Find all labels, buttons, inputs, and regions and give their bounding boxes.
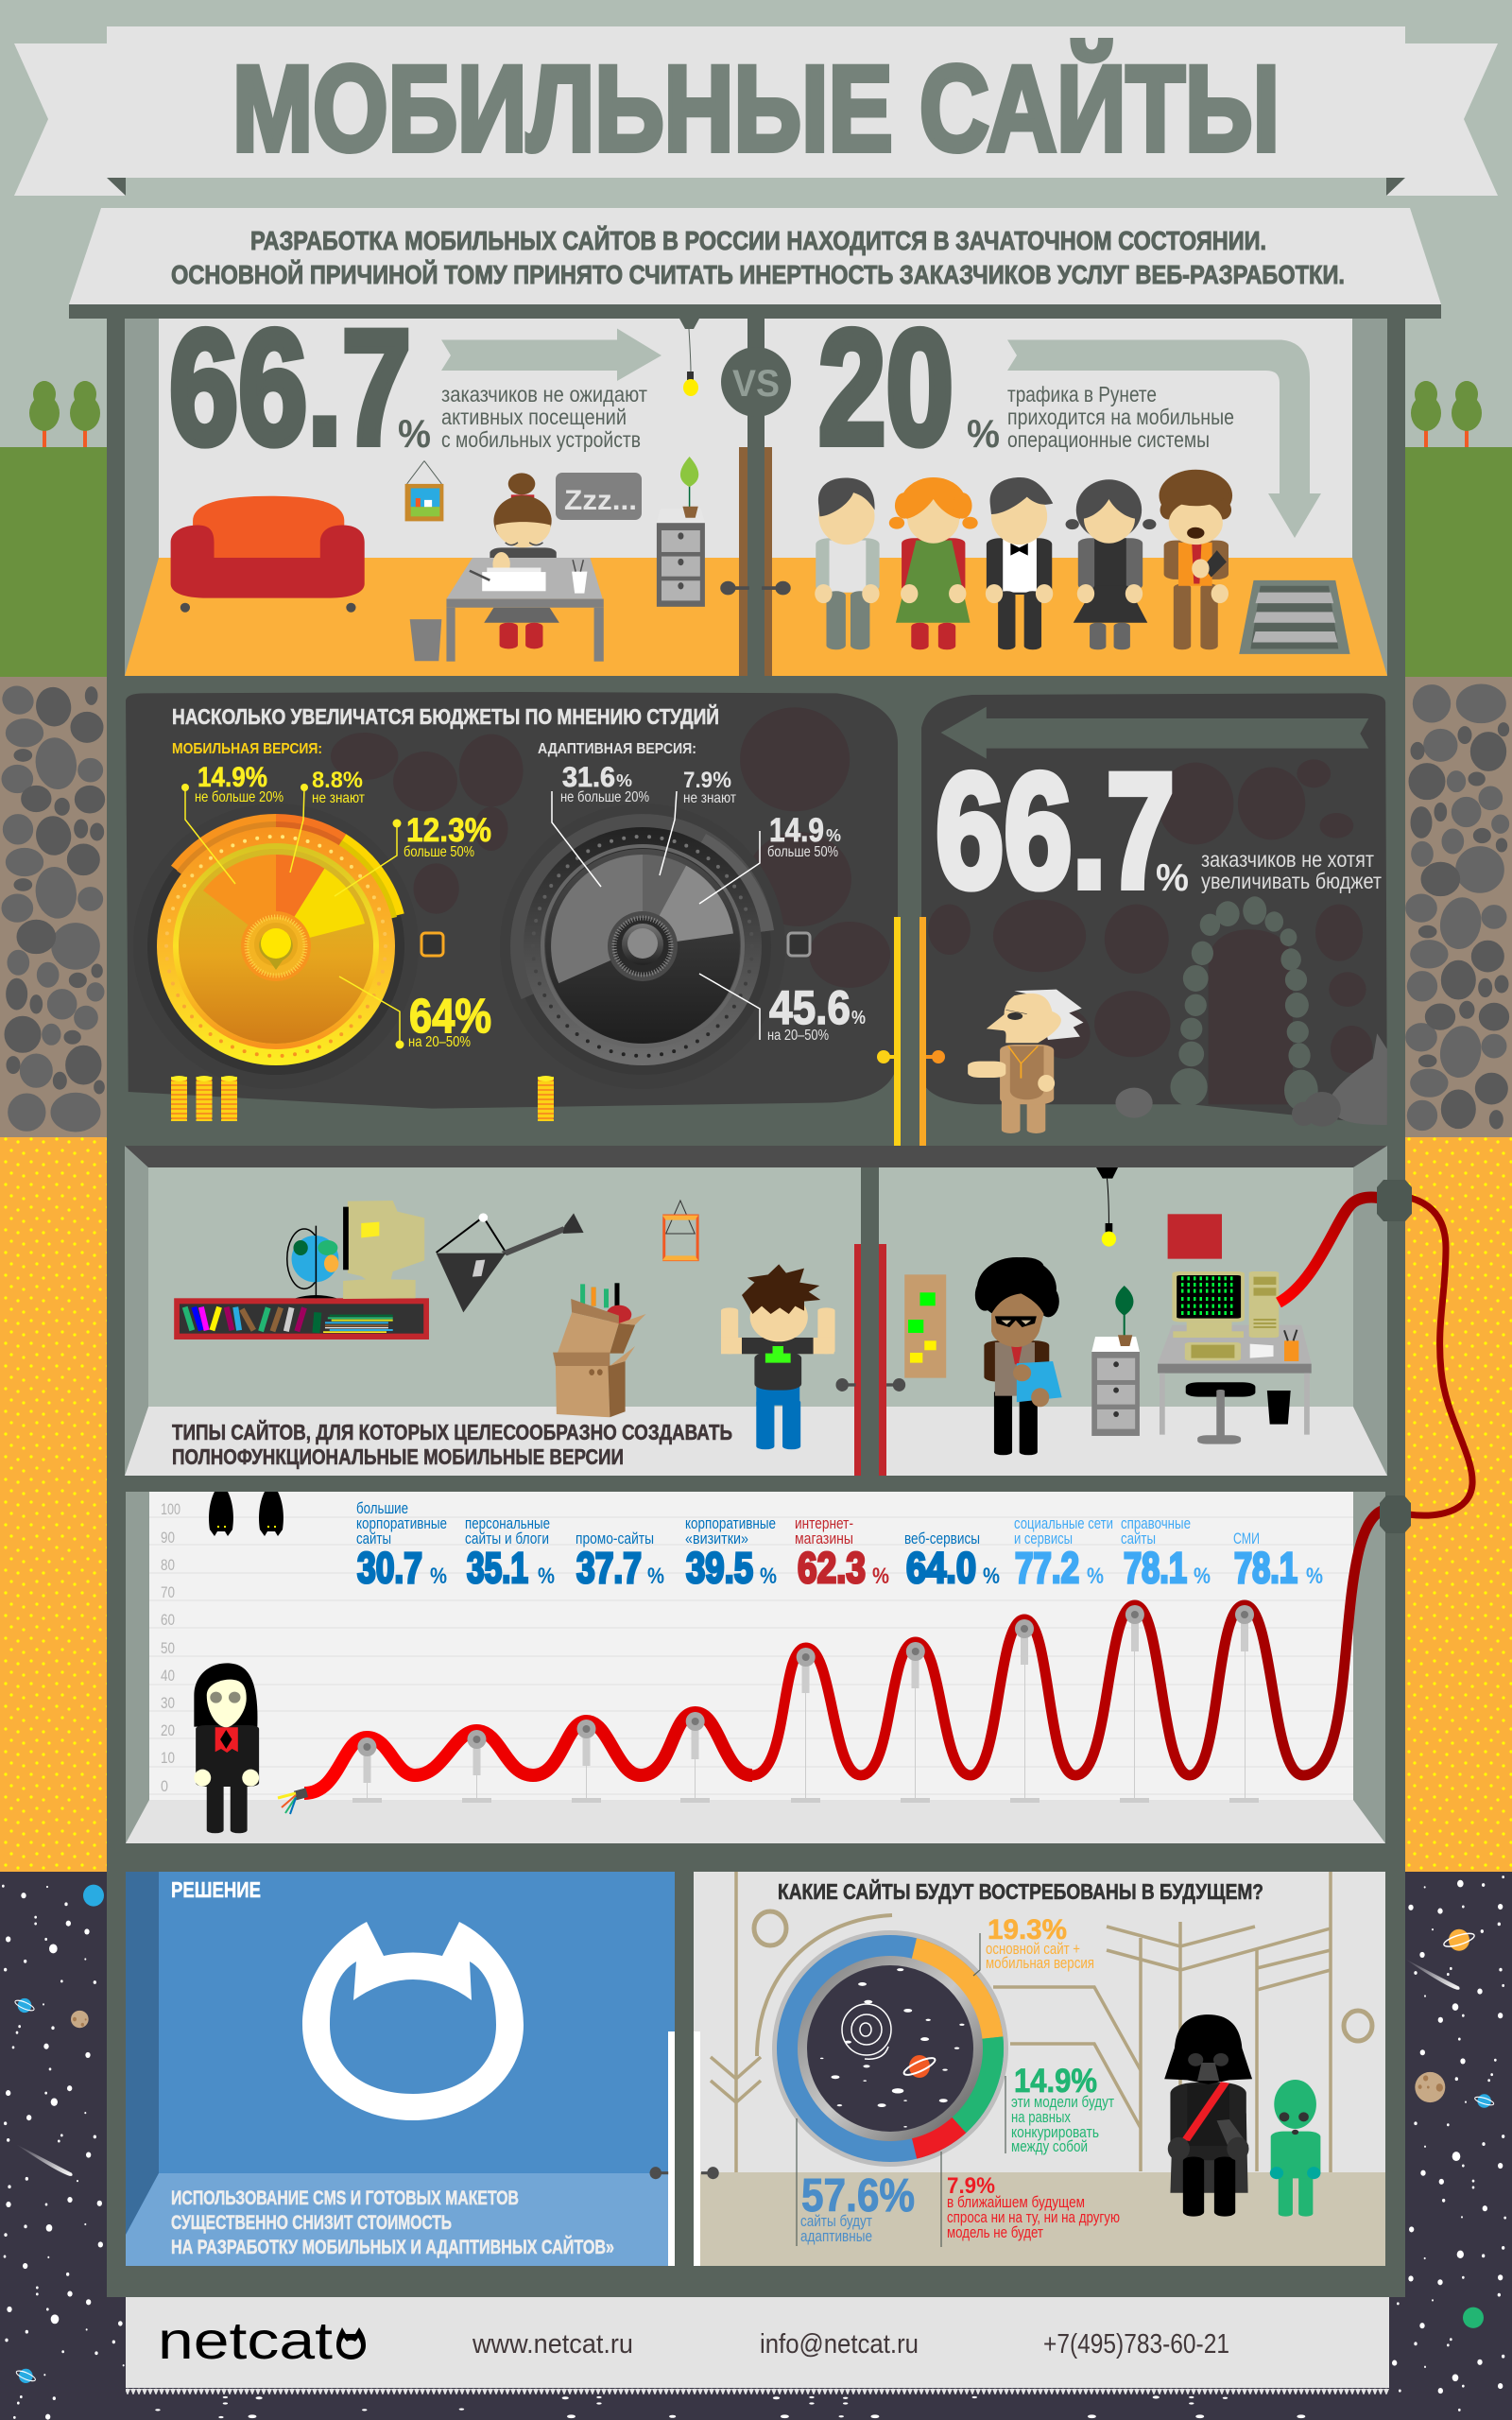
category: large corporate [356, 1499, 447, 1592]
value 12.3: 12.3% [406, 812, 491, 849]
category: online stores: магазины [795, 1530, 853, 1547]
y axis labels: 20 [161, 1721, 175, 1739]
title: МОБИЛЬНЫЕ САЙТЫ [232, 41, 1280, 177]
person 4 [1066, 479, 1156, 649]
icon: bats [209, 1492, 284, 1536]
stars and planets right [1392, 1876, 1506, 2411]
rocks right [1406, 684, 1508, 1130]
category: reference sites: сайты [1121, 1530, 1156, 1547]
subtitle [171, 225, 1345, 289]
category: personal: % [538, 1564, 555, 1589]
illustration: workshop objects and characters [174, 1167, 1312, 1455]
power cable from computer [1279, 1198, 1378, 1303]
value 7.9: модель не будет [947, 2223, 1043, 2241]
trees right [1411, 381, 1482, 447]
footer panel [126, 2297, 1389, 2394]
y axis labels: 100 [161, 1500, 180, 1518]
icon: dial handle gray [788, 933, 810, 956]
solution text [171, 2187, 614, 2258]
trees left [29, 381, 100, 447]
email: info@netcat.ru [760, 2329, 919, 2360]
value 45.6: на 20–50% [767, 1028, 829, 1044]
value 7.9: 7.9% [947, 2173, 995, 2199]
vs badge: VS [732, 363, 780, 405]
category: web services: веб-сервисы [904, 1530, 980, 1547]
flying v guitar [437, 1213, 584, 1312]
callout lines: donut [797, 1933, 1005, 2247]
desk with computer [1158, 1271, 1312, 1435]
solution heading: РЕШЕНИЕ [171, 1877, 261, 1902]
value 14.9: % [826, 826, 841, 845]
person 3 [986, 477, 1053, 649]
category: social networks: и сервисы [1014, 1530, 1073, 1547]
value 64: на 20–50% [408, 1034, 471, 1050]
value 45.6: % [851, 1008, 866, 1028]
stat: 20 percent: приходится на мобильные [1007, 405, 1234, 429]
category: web services: % [983, 1564, 1000, 1589]
value 14.9: на равных [1011, 2108, 1071, 2126]
cave arch stones [1170, 896, 1318, 1111]
soil layer [0, 677, 1512, 1137]
category: large corporate: % [430, 1564, 447, 1589]
door knobs [720, 581, 791, 595]
icon: netcat cat logo [302, 1922, 524, 2120]
vs badge [721, 347, 791, 417]
panel: cave with 66.7 [921, 693, 1387, 1133]
solution text: ИСПОЛЬЗОВАНИЕ CMS И ГОТОВЫХ МАКЕТОВ [171, 2187, 519, 2209]
category: web services: 64.0 [906, 1544, 976, 1592]
netcat logo: netcat [158, 2310, 334, 2370]
value 8.8: 8.8% [312, 768, 363, 793]
old computer monitor [343, 1201, 424, 1299]
category: business cards: корпоративные [685, 1514, 776, 1532]
sleeping woman at desk [446, 473, 604, 662]
chart: cable wave line [304, 1509, 1389, 1793]
illustration: door knobs, dark lord and alien [650, 2014, 1320, 2217]
chart: mobile version vault dial [133, 804, 419, 1089]
website: www.netcat.ru [472, 2329, 633, 2360]
category: online stores: интернет- [795, 1514, 853, 1532]
cable end wires [278, 1788, 308, 1814]
value 12.3 [404, 812, 491, 860]
category: personal: персональные [465, 1514, 550, 1532]
category: reference sites: % [1194, 1564, 1211, 1589]
cable clamp upper [1377, 1180, 1412, 1221]
curly-haired man with folder [975, 1257, 1062, 1455]
phone: +7(495)783-60-21 [1043, 2329, 1229, 2360]
icon: coin stacks [171, 1076, 237, 1121]
value 14.9 [767, 812, 841, 860]
person 2 [889, 477, 978, 649]
person 5 with phone [1160, 470, 1232, 649]
stat: 66.7 percent: % [398, 411, 431, 456]
zzz bubble [556, 473, 642, 520]
callouts: adaptive version [552, 762, 866, 1044]
space layer [0, 1872, 1512, 2420]
cable clamp lower [1380, 1495, 1411, 1533]
value 19.3: мобильная версия [986, 1954, 1094, 1972]
icon: coin stack [538, 1076, 554, 1121]
y axis labels: 50 [161, 1639, 175, 1657]
stat: 20 percent [818, 297, 1234, 478]
y axis labels: 90 [161, 1529, 175, 1547]
door knobs [650, 2167, 719, 2179]
category labels and values [356, 1499, 1323, 1592]
value 12.3: больше 50% [404, 844, 474, 860]
value 7.9: 7.9% [683, 768, 731, 793]
solution text: НА РАЗРАБОТКУ МОБИЛЬНЫХ И АДАПТИВНЫХ САЙТОВ» [171, 2236, 614, 2258]
corkboard [904, 1274, 946, 1378]
chart: adaptive version vault dial [500, 804, 785, 1089]
category: media: % [1306, 1564, 1323, 1589]
value 14.9 [1011, 2063, 1114, 2155]
wall picture [405, 461, 443, 521]
stat: 20 percent: % [967, 411, 1000, 456]
y axis labels: 60 [161, 1611, 175, 1629]
trash bin [410, 619, 441, 661]
category: reference sites: 78.1 [1124, 1544, 1187, 1592]
hanging lamp [1096, 1167, 1118, 1247]
category: social networks: % [1087, 1564, 1104, 1589]
person 1 [815, 477, 880, 649]
icon: dial handle yellow [421, 933, 443, 956]
y axis labels: 80 [161, 1556, 175, 1574]
category: online stores [795, 1514, 889, 1592]
value 7.9: не знают [683, 790, 737, 806]
category: social networks [1014, 1514, 1113, 1592]
category: promo: промо-сайты [576, 1530, 654, 1547]
value 7.9 [683, 768, 737, 806]
stat: 66.7 in cave: % [1156, 856, 1189, 899]
stat: 66.7 in cave: 66.7 [936, 740, 1175, 922]
value 45.6: 45.6 [769, 981, 850, 1034]
y axis labels: 70 [161, 1583, 175, 1601]
pulley wheels [357, 1605, 1254, 1756]
power cable outside the wall [1408, 1198, 1472, 1515]
budget heading: НАСКОЛЬКО УВЕЛИЧАТСЯ БЮДЖЕТЫ ПО МНЕНИЮ СТУДИЙ [172, 703, 719, 729]
y axis labels: 40 [161, 1667, 175, 1685]
value 31.6: не больше 20% [560, 789, 649, 805]
ceiling lamp [679, 319, 699, 396]
category: large corporate: сайты [356, 1530, 391, 1547]
category: promo: % [647, 1564, 664, 1589]
y axis labels: 30 [161, 1694, 175, 1712]
stat: 66.7 in cave: заказчиков не хотят [1201, 847, 1374, 872]
stars in donut [820, 1968, 965, 2127]
stat: 66.7 percent: с мобильных устройств [441, 427, 641, 452]
value 19.3: основной сайт + [986, 1940, 1080, 1958]
cave boulders [1115, 1033, 1387, 1127]
chart: donut [772, 1930, 1008, 2167]
arrow right [441, 329, 662, 381]
value 14.9: 14.9 [769, 812, 824, 849]
rocks left [0, 683, 104, 1132]
stat: 66.7 percent: заказчиков не ожидают [441, 382, 647, 406]
man with raised arms [721, 1264, 835, 1449]
heading: site types: ТИПЫ САЙТОВ, ДЛЯ КОТОРЫХ ЦЕЛЕСООБРАЗНО СОЗДАВАТЬ [172, 1419, 732, 1444]
callouts: mobile version [181, 762, 491, 1050]
y axis labels: 10 [161, 1749, 175, 1767]
panel: workshop room [125, 1146, 1387, 1476]
stat: 66.7 in cave: увеличивать бюджет [1201, 869, 1382, 893]
galaxy spiral and planet [842, 2004, 936, 2078]
roof with subtitle [69, 208, 1441, 319]
value 57.6: сайты будут [800, 2212, 872, 2230]
y axis labels: 0 [161, 1777, 168, 1795]
category: reference sites [1121, 1514, 1211, 1592]
y axis labels [161, 1500, 180, 1795]
hanging frame [662, 1201, 698, 1260]
title ribbon [14, 26, 1498, 196]
category: large corporate: 30.7 [357, 1544, 422, 1592]
category: online stores: % [872, 1564, 889, 1589]
category: large corporate: корпоративные [356, 1514, 447, 1532]
category: promo: 37.7 [576, 1544, 642, 1592]
goth girl [194, 1663, 259, 1833]
pulleys [352, 1615, 1259, 1803]
value 14.9: больше 50% [767, 844, 838, 860]
sofa [171, 496, 365, 613]
value 14.9: 14.9% [1014, 2063, 1097, 2100]
netcat logo [158, 2310, 366, 2370]
value 8.8 [312, 768, 366, 806]
value 7.9 [947, 2173, 1120, 2241]
value 14.9: 14.9% [198, 762, 267, 793]
category: business cards: 39.5 [686, 1544, 753, 1592]
stairs hatch [1239, 580, 1350, 654]
value 14.9: не больше 20% [195, 789, 284, 805]
value 7.9: спроса ни на ту, ни на другую [947, 2208, 1120, 2226]
category: web services [904, 1530, 1000, 1592]
stat: 20 percent: трафика в Рунете [1007, 382, 1157, 406]
label: mobile version: МОБИЛЬНАЯ ВЕРСИЯ: [172, 741, 322, 757]
zzz bubble: Zzz... [564, 485, 637, 516]
value 31.6: 31.6 [562, 762, 615, 793]
stool and bin [1186, 1382, 1291, 1444]
category: business cards: «визитки» [685, 1530, 748, 1547]
arrow left [941, 707, 1368, 759]
panel: top floor room [125, 319, 1387, 676]
panel: future sites [694, 1872, 1385, 2266]
value 57.6 [800, 2170, 915, 2245]
red picture [1168, 1214, 1222, 1259]
house body [107, 319, 1405, 2297]
stat: 66.7 percent [169, 297, 647, 478]
value 14.9: эти модели будут [1011, 2093, 1114, 2111]
sky background [0, 0, 1512, 447]
bent arrow down [1007, 340, 1321, 538]
illustration: room furniture and characters [171, 457, 1350, 662]
value 8.8: не знают [312, 790, 366, 806]
old man with key [968, 990, 1083, 1133]
value 57.6: 57.6% [801, 2170, 915, 2221]
value 19.3: 19.3% [988, 1914, 1067, 1945]
value 64: 64% [409, 989, 491, 1043]
category: online stores: 62.3 [798, 1544, 866, 1592]
category: media: 78.1 [1234, 1544, 1297, 1592]
category: large corporate: большие [356, 1499, 408, 1517]
stat: 20 percent: 20 [818, 297, 954, 478]
category: business cards [685, 1514, 777, 1592]
cardboard boxes [553, 1283, 646, 1417]
stat: 66.7 percent: активных посещений [441, 405, 627, 429]
category: social networks: 77.2 [1015, 1544, 1079, 1592]
heading: site types: ПОЛНОФУНКЦИОНАЛЬНЫЕ МОБИЛЬНЫЕ ВЕРСИИ [172, 1444, 624, 1469]
grass ground [0, 447, 1512, 677]
category: business cards: % [760, 1564, 777, 1589]
file cabinet with plant [657, 457, 705, 607]
category: reference sites: справочные [1121, 1514, 1191, 1532]
sand layer [0, 1137, 1512, 1872]
category: media: СМИ [1233, 1530, 1260, 1547]
globe [287, 1226, 338, 1298]
category: personal: сайты и блоги [465, 1530, 549, 1547]
cabinet with plant [1091, 1286, 1140, 1436]
value 14.9: между собой [1011, 2137, 1088, 2155]
value 57.6: адаптивные [800, 2227, 872, 2245]
bookshelf [174, 1298, 429, 1340]
dark lord [1164, 2014, 1252, 2217]
panel: budgets cave [126, 692, 898, 1109]
value 31.6: % [616, 771, 632, 790]
value 14.9: конкурировать [1011, 2123, 1099, 2141]
category: personal [465, 1514, 555, 1592]
heading: site types [172, 1419, 732, 1469]
label: adaptive version: АДАПТИВНАЯ ВЕРСИЯ: [538, 741, 696, 757]
stars and planets left [2, 1885, 125, 2420]
value 7.9: в ближайшем будущем [947, 2193, 1085, 2211]
solution text: СУЩЕСТВЕННО СНИЗИТ СТОИМОСТЬ [171, 2212, 452, 2234]
bottom stars [155, 2395, 1305, 2418]
door: yellow bars and knobs [877, 917, 945, 1146]
category: social networks: социальные сети [1014, 1514, 1113, 1532]
value 31.6 [560, 762, 649, 805]
stat: 20 percent: операционные системы [1007, 427, 1210, 452]
value 19.3 [986, 1914, 1094, 1972]
future heading: КАКИЕ САЙТЫ БУДУТ ВОСТРЕБОВАНЫ В БУДУЩЕМ? [778, 1878, 1263, 1904]
subtitle: РАЗРАБОТКА МОБИЛЬНЫХ САЙТОВ В РОССИИ НАХОДИТСЯ В ЗАЧАТОЧНОМ СОСТОЯНИИ. [250, 225, 1266, 255]
category: personal: 35.1 [467, 1544, 528, 1592]
panel: solution [126, 1872, 675, 2266]
alien [1270, 2080, 1320, 2217]
stat: 66.7 percent: 66.7 [169, 297, 411, 478]
panel: chart room [126, 1492, 1385, 1843]
value 14.9 [195, 762, 284, 805]
door knobs [835, 1378, 905, 1392]
wall decoration lines [711, 1872, 1372, 2172]
